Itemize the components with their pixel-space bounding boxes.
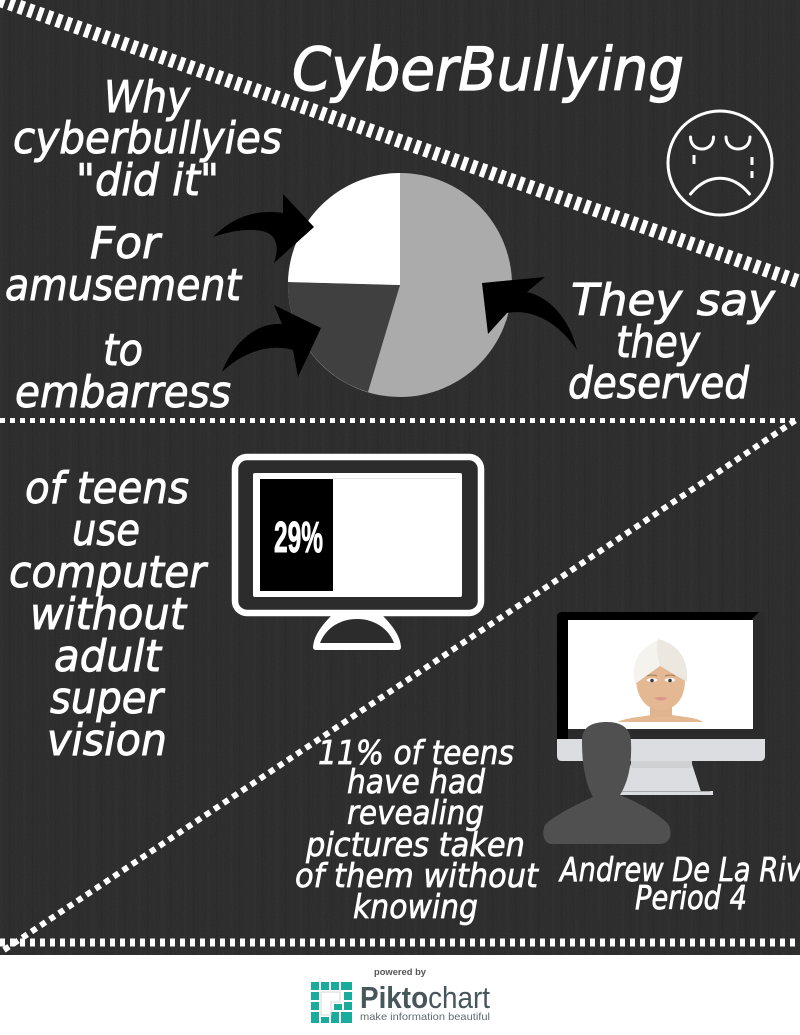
text block: teens without supervision: of teens bbox=[25, 463, 189, 514]
text block: 11% revealing pictures: 11% of teens bbox=[318, 733, 514, 772]
label: for amusement: For bbox=[90, 218, 163, 269]
woman portrait bbox=[618, 639, 703, 722]
text block: 11% revealing pictures: knowing bbox=[353, 887, 478, 926]
pie chart bbox=[288, 173, 512, 397]
arrow: embarrass to pie bbox=[222, 305, 321, 377]
text block: 11% revealing pictures: revealing bbox=[347, 793, 484, 832]
text: powered by: powered by bbox=[374, 967, 427, 978]
heading: why cyberbullies did it: "did it" bbox=[76, 155, 219, 206]
text block: teens without supervision bbox=[9, 463, 209, 766]
label: they say they deserved: they bbox=[616, 317, 701, 368]
label: they say they deserved bbox=[568, 275, 776, 409]
text: tagline: make information beautiful bbox=[360, 1011, 490, 1023]
text block: 11% revealing pictures: of them without bbox=[295, 856, 539, 895]
text block: 11% revealing pictures: pictures taken bbox=[305, 825, 525, 864]
icon: crying sad face bbox=[668, 111, 772, 215]
credit: author and period: Period 4 bbox=[635, 878, 747, 917]
text block: teens without supervision: vision bbox=[47, 715, 167, 766]
arrow: deserved to pie bbox=[482, 277, 577, 350]
text block: teens without supervision: without bbox=[30, 589, 188, 640]
text block: teens without supervision: use bbox=[72, 505, 140, 556]
footer: powered by Piktochart bbox=[0, 955, 800, 1035]
label: to embarrass: embarress bbox=[15, 367, 231, 418]
label: for amusement bbox=[5, 218, 243, 311]
label: to embarrass: to bbox=[103, 325, 143, 376]
text block: 11% revealing pictures bbox=[295, 733, 539, 926]
heading: why cyberbullies did it: Why bbox=[104, 72, 191, 123]
heading: why cyberbullies did it bbox=[13, 72, 282, 206]
icon: Piktochart logo bbox=[311, 982, 352, 1023]
icon: monitor with 29% bar bbox=[235, 457, 481, 650]
credit: author and period bbox=[558, 850, 800, 917]
bar value 29% bbox=[260, 479, 333, 591]
text block: teens without supervision: super bbox=[50, 673, 166, 724]
title: CyberBullying bbox=[292, 35, 684, 105]
label: they say they deserved: deserved bbox=[568, 358, 750, 409]
label: to embarrass bbox=[15, 325, 231, 418]
bar value 29%: 29% bbox=[274, 513, 323, 562]
label: for amusement: amusement bbox=[5, 260, 243, 311]
label: they say they deserved: They say bbox=[571, 275, 776, 326]
text block: teens without supervision: adult bbox=[54, 631, 163, 682]
text: Piktochart wordmark: Piktochart bbox=[360, 980, 490, 1015]
heading: why cyberbullies did it: cyberbullyies bbox=[13, 113, 282, 164]
text block: 11% revealing pictures: have had bbox=[347, 762, 486, 801]
icon: person silhouette bbox=[543, 722, 671, 844]
arrow: amusement to pie bbox=[213, 194, 314, 263]
icon: desktop computer with woman on screen bbox=[557, 612, 765, 795]
text block: teens without supervision: computer bbox=[9, 547, 209, 598]
